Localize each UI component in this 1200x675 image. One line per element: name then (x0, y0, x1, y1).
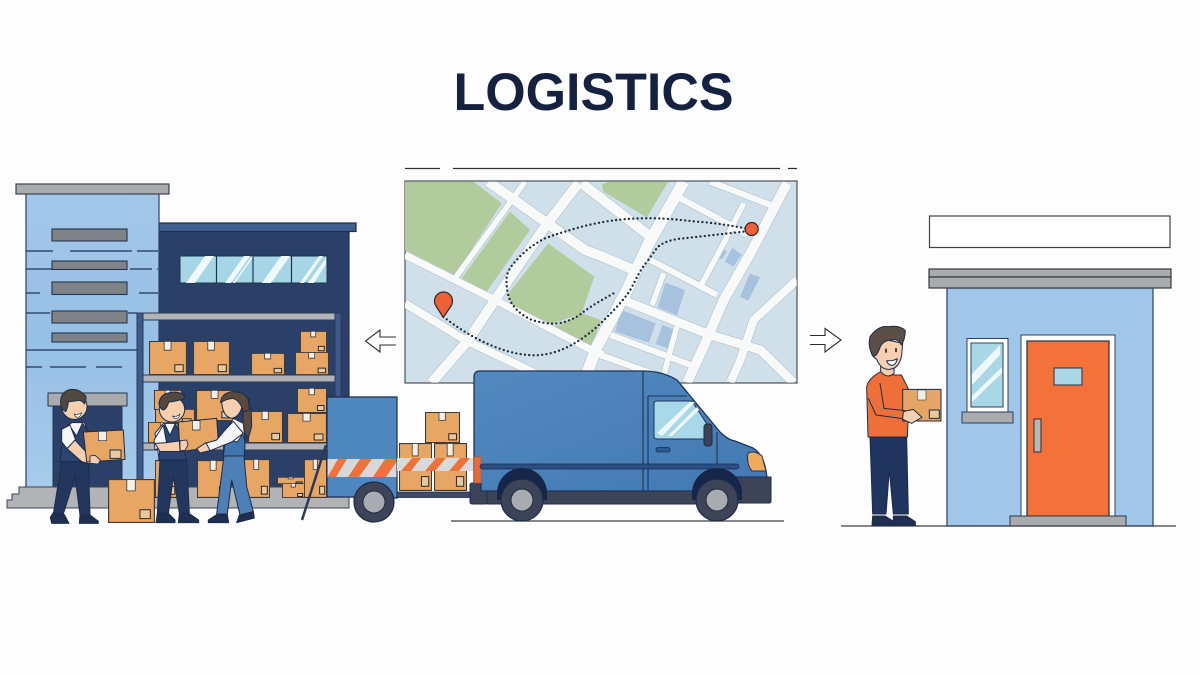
lift platform (397, 492, 472, 498)
customer hand (903, 409, 922, 423)
barrier post at van rear (474, 457, 481, 483)
ground line (841, 525, 1176, 527)
customer neck (881, 363, 894, 376)
van door mirror (704, 424, 712, 446)
van front bumper (733, 477, 771, 503)
warehouse scene (7, 184, 356, 523)
customer smile (887, 359, 897, 365)
house roof (929, 269, 1171, 288)
tow hitch (470, 483, 487, 504)
map drawing (405, 182, 797, 383)
customer head (871, 338, 903, 369)
customer shirt (867, 372, 909, 437)
delivery house (841, 216, 1176, 526)
van sill (487, 490, 697, 504)
customer arm (868, 383, 905, 419)
van panel lines (643, 371, 717, 491)
dark warehouse building (159, 223, 356, 491)
bottom shelf boxes (155, 459, 327, 498)
van headlight (748, 452, 766, 471)
stacked boxes on lift (399, 412, 467, 491)
door window (1054, 368, 1082, 385)
title: LOGISTICS (454, 63, 734, 122)
customer eyes (886, 349, 896, 352)
parks (405, 182, 668, 346)
origin pin (434, 292, 452, 318)
door frame (1021, 335, 1115, 516)
roads (405, 182, 797, 383)
right arrow (810, 328, 841, 352)
destination marker (745, 222, 758, 236)
female worker (197, 392, 254, 523)
door handle (1034, 419, 1041, 452)
house wall (947, 288, 1153, 526)
decorative lines above map (405, 168, 797, 170)
rear wheel (497, 468, 547, 521)
ramp strut (302, 445, 326, 520)
customer legs and shoes (870, 437, 915, 526)
worker carrying box (50, 389, 125, 523)
tower grey window slats (52, 229, 127, 342)
customer hair (869, 326, 905, 357)
van belt moulding (480, 464, 739, 469)
hazard barrier (397, 458, 474, 471)
large box on ground (108, 479, 155, 523)
loading dock platform and steps (7, 487, 349, 508)
worker passing box (154, 392, 219, 523)
trailer wheel (354, 482, 394, 522)
trailer box (327, 397, 397, 498)
customer receiving parcel (867, 326, 941, 526)
top shelf boxes (149, 331, 329, 375)
parcel (903, 389, 941, 421)
customer upper body (867, 326, 941, 437)
delivery van (474, 371, 771, 521)
blank sign board (930, 216, 1170, 248)
dotted route (443, 218, 745, 355)
map frame and base (405, 181, 797, 383)
buildings (615, 247, 760, 349)
trailer stripe (328, 459, 396, 477)
blue office tower (16, 184, 169, 488)
middle shelf boxes (148, 388, 327, 443)
van window (654, 401, 712, 439)
road casing (405, 182, 797, 383)
van body (474, 371, 767, 491)
warehouse clerestory window (180, 256, 327, 283)
left arrow (366, 330, 396, 352)
front wheel (692, 468, 742, 521)
storage racking (137, 313, 341, 489)
tower doorway (48, 393, 127, 489)
delivery trailer and boxes (302, 397, 784, 522)
ground line under van (451, 520, 784, 522)
door step (1010, 516, 1126, 526)
van door handle (656, 448, 670, 452)
orange door (1027, 341, 1109, 516)
house window (962, 338, 1013, 423)
route map (405, 168, 797, 383)
